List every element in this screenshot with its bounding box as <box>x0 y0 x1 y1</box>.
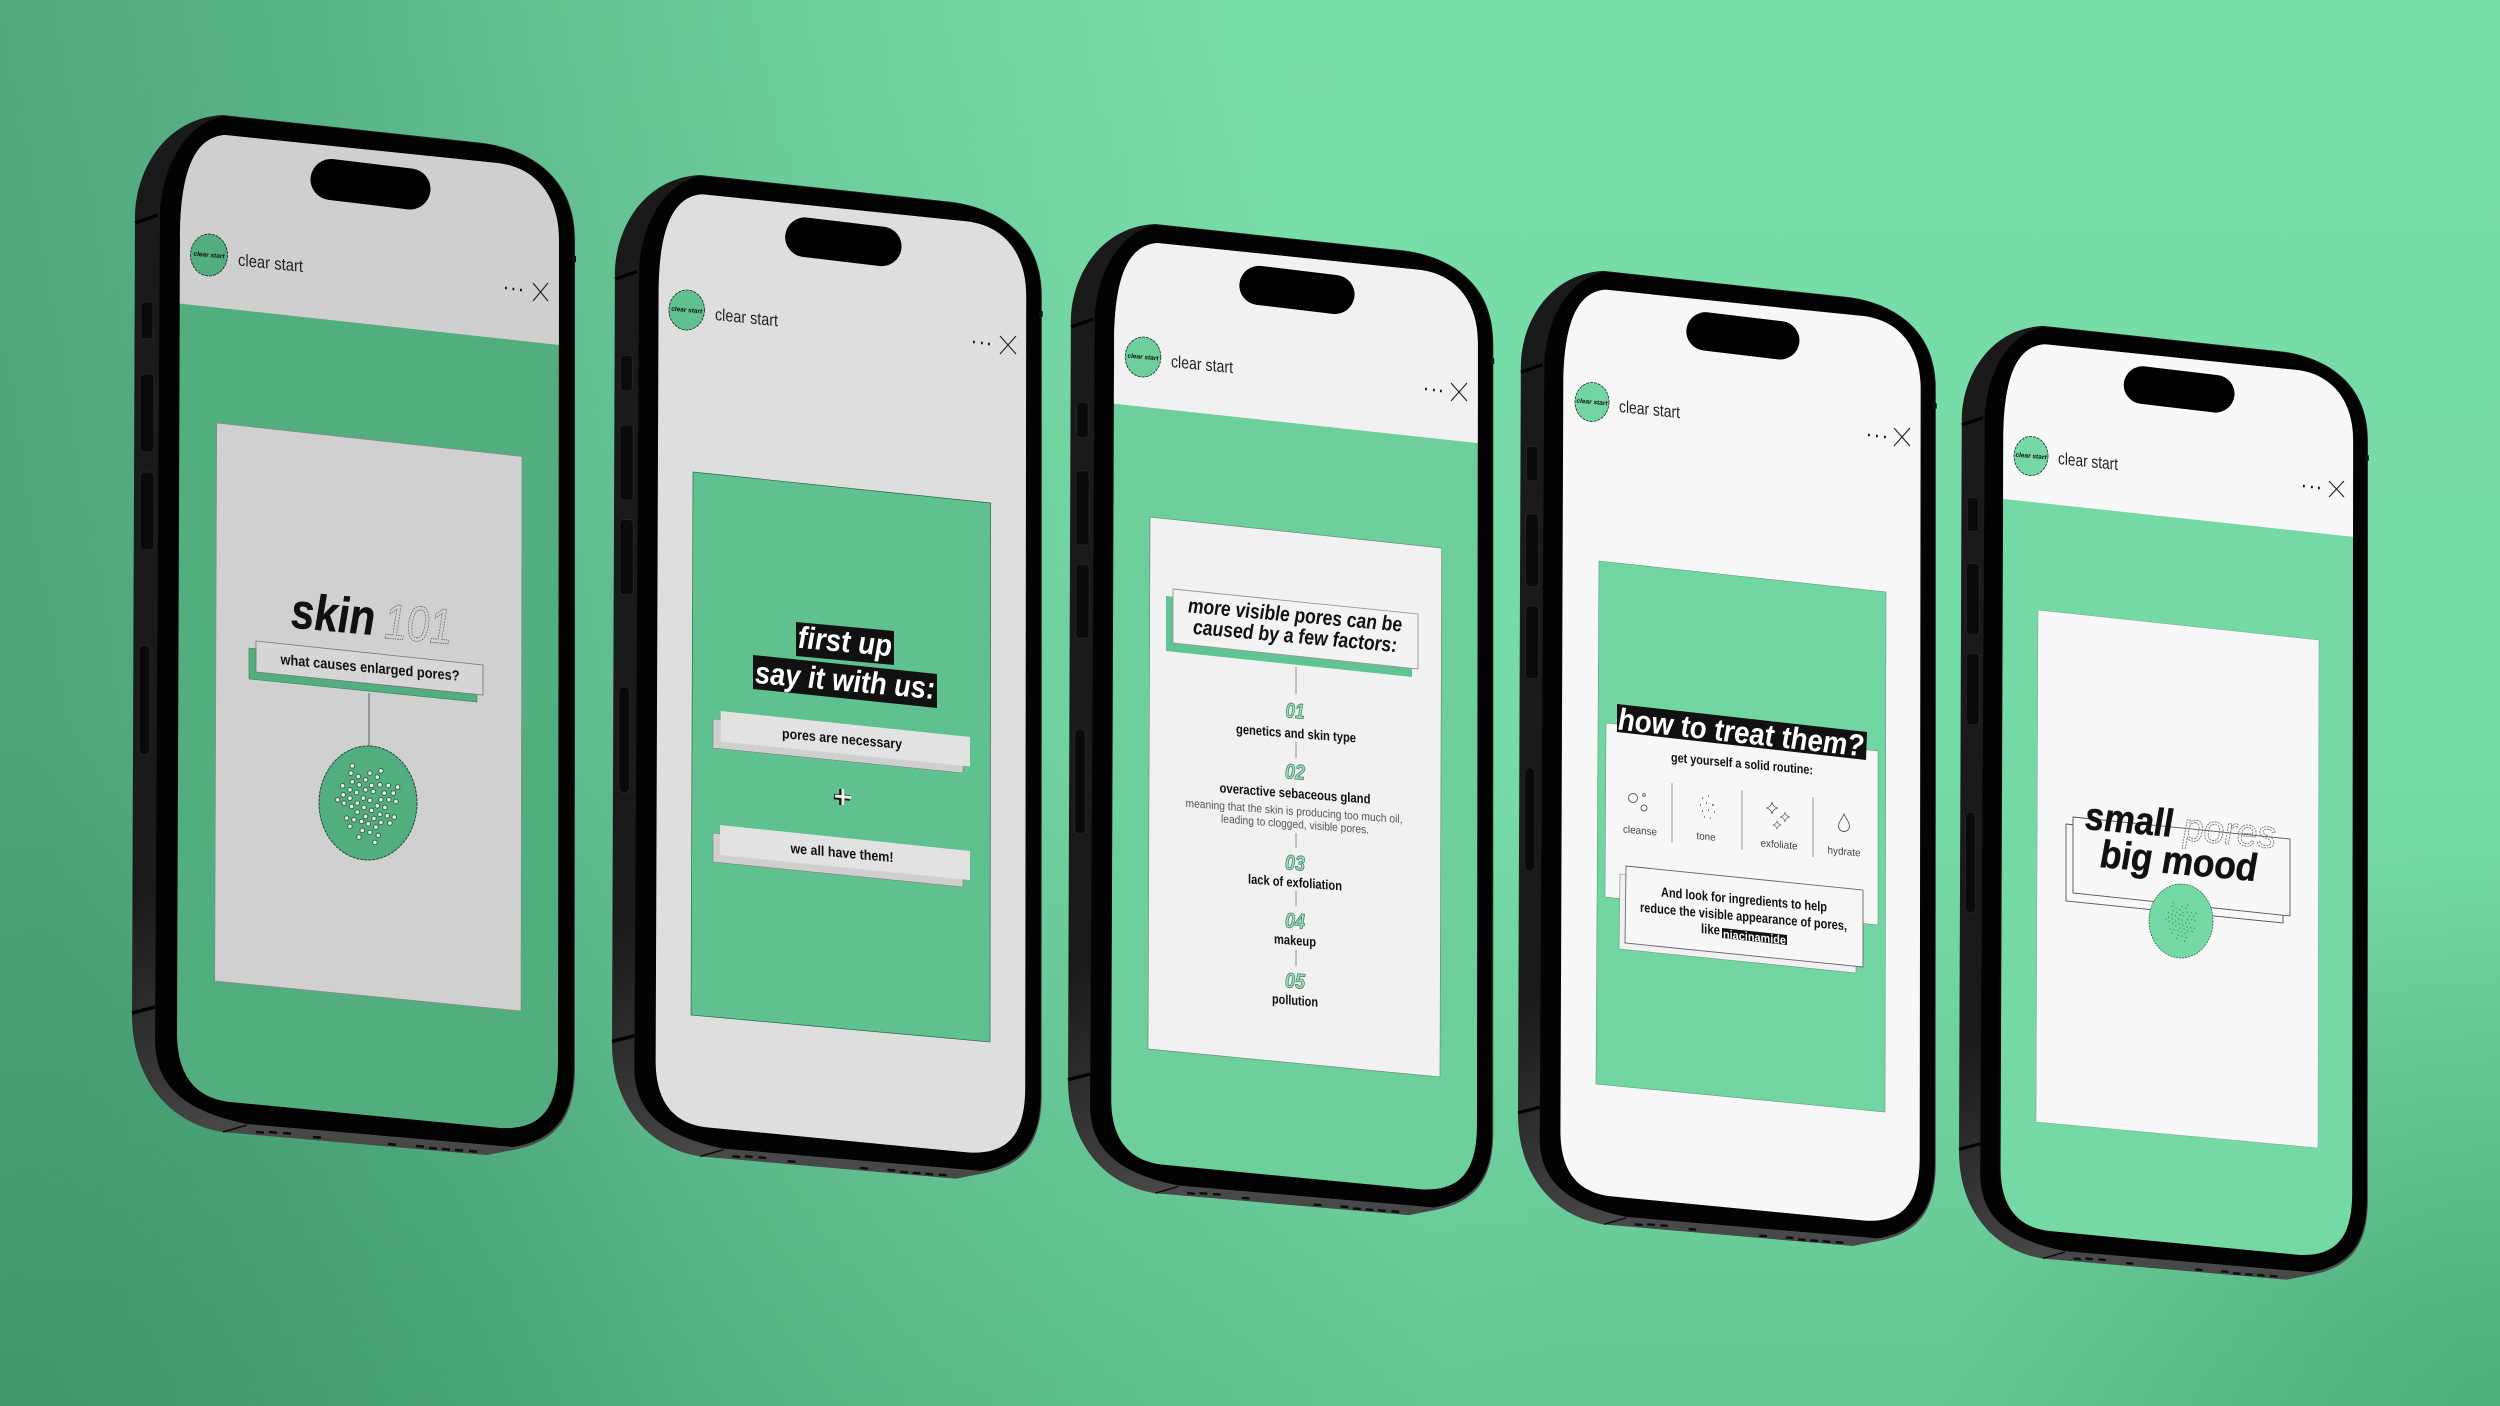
factor 03: lack of exfoliation <box>1248 871 1342 894</box>
phone 3: factors <box>1068 224 1494 1215</box>
phone 4 body and screen <box>1518 271 1937 1246</box>
label: pores are necessary: pores are necessary <box>782 725 902 752</box>
phone 2 body and screen <box>612 175 1043 1179</box>
phone 4 story header: clear start <box>1619 397 1680 422</box>
phone 1 card <box>215 423 522 1011</box>
step: cleanse: cleanse <box>1623 823 1657 839</box>
phone 5 story header <box>2014 436 2344 497</box>
factor 05: 05 <box>1285 969 1305 994</box>
phone 1 screen <box>170 120 570 1128</box>
step: hydrate: hydrate <box>1828 845 1861 859</box>
phone 3 story header: clear start <box>1127 353 1159 362</box>
factor 01: 01 <box>1285 699 1305 724</box>
routine panel: get yourself a solid routine: <box>1671 750 1813 777</box>
step: hydrate <box>1828 814 1861 859</box>
phone 5 card <box>2036 610 2319 1148</box>
ingredients note: like <box>1701 921 1720 938</box>
pore circle illustration <box>2149 884 2213 958</box>
step: exfoliate <box>1760 802 1798 853</box>
phone 2 story header <box>669 290 1016 354</box>
phone 3 story header <box>1125 337 1467 401</box>
title: skin 101 <box>291 583 452 655</box>
pore circle illustration <box>319 746 417 860</box>
label: we all have them <box>713 825 970 887</box>
phone 2 card <box>691 472 991 1042</box>
label: pores are necessary <box>713 711 970 773</box>
ingredients note: And look for ingredients to help <box>1661 885 1827 914</box>
heading: how to treat them: how to treat them? <box>1618 702 1864 764</box>
phone 1 story header <box>190 234 548 301</box>
phone 4: how to treat them <box>1518 271 1937 1246</box>
title: skin 101: 101 <box>384 593 452 655</box>
closing headline: pores <box>2182 806 2276 857</box>
factor 05: pollution <box>1272 991 1318 1010</box>
closing headline: small <box>2085 795 2174 846</box>
title: skin 101: skin <box>291 583 375 646</box>
factor 02: meaning that the skin is producing too much oil, <box>1186 798 1402 826</box>
factor 02: overactive sebaceous gland <box>1220 780 1370 807</box>
phone 1: skin 101 <box>132 115 576 1155</box>
subtitle label <box>249 641 483 702</box>
phone 5 story header: clear start <box>2015 452 2047 461</box>
heading box: caused by a few factors: <box>1193 616 1397 657</box>
factor 01: genetics and skin type <box>1236 722 1356 746</box>
phone 5 body and screen <box>1959 326 2369 1280</box>
step: tone: tone <box>1696 830 1716 844</box>
step: cleanse <box>1623 794 1657 839</box>
closing headline <box>2085 795 2276 890</box>
phone 2 story header: clear start <box>671 306 703 315</box>
factor 05 <box>1272 969 1318 1010</box>
step: tone <box>1696 796 1716 844</box>
connector lines <box>1295 667 1297 966</box>
phone 3 story header: clear start <box>1171 352 1233 377</box>
heading box <box>1166 589 1418 677</box>
phone 4 card <box>1596 561 1886 1112</box>
closing headline: big mood <box>2100 833 2258 890</box>
phone 2 story header: clear start <box>715 305 778 330</box>
outline frames <box>2066 817 2290 923</box>
phone 3 body and screen <box>1068 224 1494 1215</box>
subtitle label: what causes enlarged pores? <box>280 652 460 685</box>
heading: first up: first up <box>798 620 892 663</box>
factor 02: 02 <box>1285 760 1305 785</box>
phone 4 story header <box>1575 382 1910 446</box>
ingredients note <box>1619 866 1863 973</box>
heading box: more visible pores can be <box>1188 594 1402 637</box>
phone 1 story header: clear start <box>238 251 303 276</box>
ingredients note: reduce the visible appearance of pores, <box>1640 900 1847 933</box>
phone 2: first up <box>612 175 1043 1179</box>
phone 5 story header: clear start <box>2058 449 2118 474</box>
phone 4 story header: clear start <box>1576 398 1608 407</box>
factor 02 <box>1186 760 1402 837</box>
phone 1 body <box>132 115 576 1155</box>
factor 04 <box>1274 909 1316 950</box>
phone 5: small pores big mood <box>1959 326 2369 1280</box>
label: we all have them: we all have them! <box>790 840 894 865</box>
factor 03 <box>1248 851 1342 894</box>
icon: plus <box>834 789 851 805</box>
factor 04: makeup <box>1274 931 1316 950</box>
heading: say it with us: say it with us: <box>755 655 935 706</box>
factor 01 <box>1236 699 1356 746</box>
phone 3 card <box>1148 517 1442 1077</box>
ingredients note: niacinamide <box>1723 927 1786 947</box>
routine panel <box>1605 702 1878 925</box>
factor 04: 04 <box>1285 909 1305 934</box>
phone 1 story header: clear start <box>193 251 225 260</box>
factor 03: 03 <box>1285 851 1305 876</box>
factor 02: leading to clogged, visible pores. <box>1221 813 1369 837</box>
step: exfoliate: exfoliate <box>1760 837 1798 853</box>
